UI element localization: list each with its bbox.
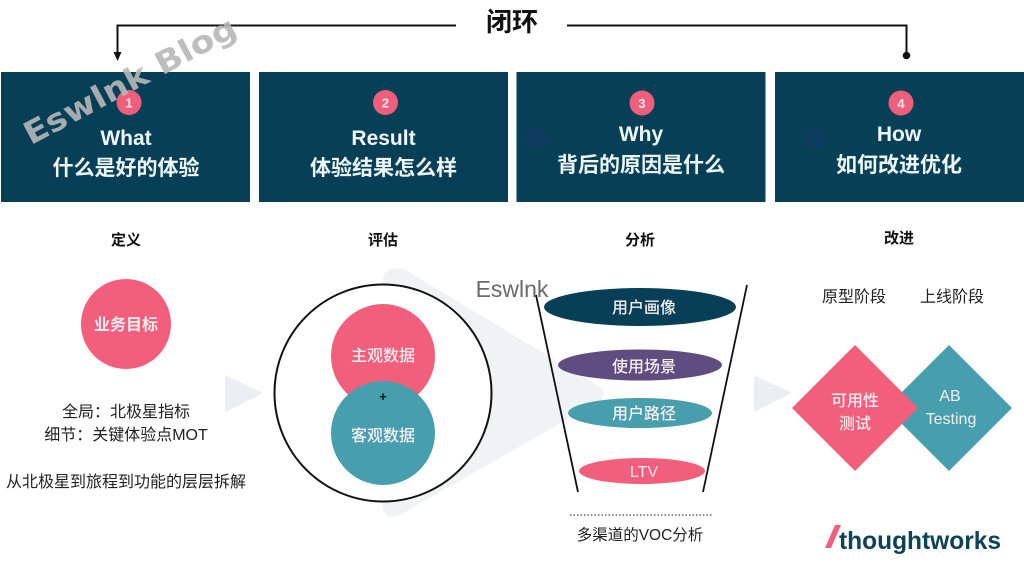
heading How: How [877,123,922,146]
badge 4 [888,90,914,116]
objective data circle: 客观数据 [351,426,415,445]
subheading how: 如何改进优化 [836,154,962,177]
business goal circle: 业务目标 [94,315,158,334]
section label: analyse: 分析 [625,231,655,249]
stage label: prototype: 原型阶段 [822,288,886,306]
ellipse: usage scenario: 使用场景 [612,358,676,376]
section label: improve: 改进 [884,230,914,247]
business goal circle [81,279,171,369]
subheading why: 背后的原因是什么 [557,154,725,177]
section label: evaluate: 评估 [368,231,398,249]
heading What: What [100,127,152,150]
ellipse: LTV: LTV [630,464,658,481]
evaluate diagram [274,284,492,502]
diamond: usability testing: 可用性 [831,392,879,410]
subheading what: 什么是好的体验 [52,156,200,180]
subjective data circle: 主观数据 [351,347,415,365]
title: closed loop: 闭环 [486,7,538,37]
panel: Why [516,72,766,202]
define text block: 细节：关键体验点MOT [44,426,208,444]
watermark: Eswlnk Blog: Eswlnk Blog [18,10,243,152]
background large pale arrow [383,268,604,517]
heading Why: Why [619,123,663,146]
diamond: usability testing [792,345,918,471]
subheading result: 体验结果怎么样 [310,156,457,180]
objective data circle [331,381,435,485]
thoughtworks logo: thoughtworks [839,527,1001,555]
badge 4: 4 [897,96,905,111]
stage label: live: 上线阶段 [920,288,984,306]
diamond: AB testing: Testing [926,411,976,428]
badge 1: 1 [125,96,133,110]
ellipse: user persona [544,288,736,326]
diamond: AB testing: AB [939,388,961,405]
faint dot 4 [804,126,826,148]
pale arrow: analyse to improve [754,375,792,412]
watermark: Eswlnk: Eswlnk [476,276,549,302]
ellipse: user persona: 用户画像 [612,299,676,317]
panel: Result [259,72,508,202]
badge 2: 2 [382,96,389,110]
badge 3: 3 [638,96,646,111]
ellipse: user path: 用户路径 [612,405,676,423]
pale arrow: define to evaluate [225,375,263,412]
section label: define: 定义 [111,231,141,249]
faint dot 3 [525,126,547,148]
plus sign: + [379,389,387,404]
panel: What [1,72,250,202]
ellipse: LTV [579,458,705,484]
ellipse: user path [568,398,712,428]
dotted divider [570,514,712,516]
badge 3 [630,90,654,116]
subjective data circle [331,304,435,408]
diamond: AB testing [886,345,1012,471]
ellipse: usage scenario [558,350,722,380]
define text block: 从北极星到旅程到功能的层层拆解 [6,473,246,491]
badge 2 [373,90,398,115]
badge 1 [116,90,142,115]
funnel [536,285,747,492]
heading Result: Result [351,127,416,150]
panel: How [775,72,1024,202]
VOC caption: 多渠道的VOC分析 [577,526,703,544]
diamond: usability testing: 测试 [839,415,871,433]
define text block: 全局：北极星指标 [62,403,190,421]
closed loop connector [114,26,910,61]
define text block [6,403,246,491]
